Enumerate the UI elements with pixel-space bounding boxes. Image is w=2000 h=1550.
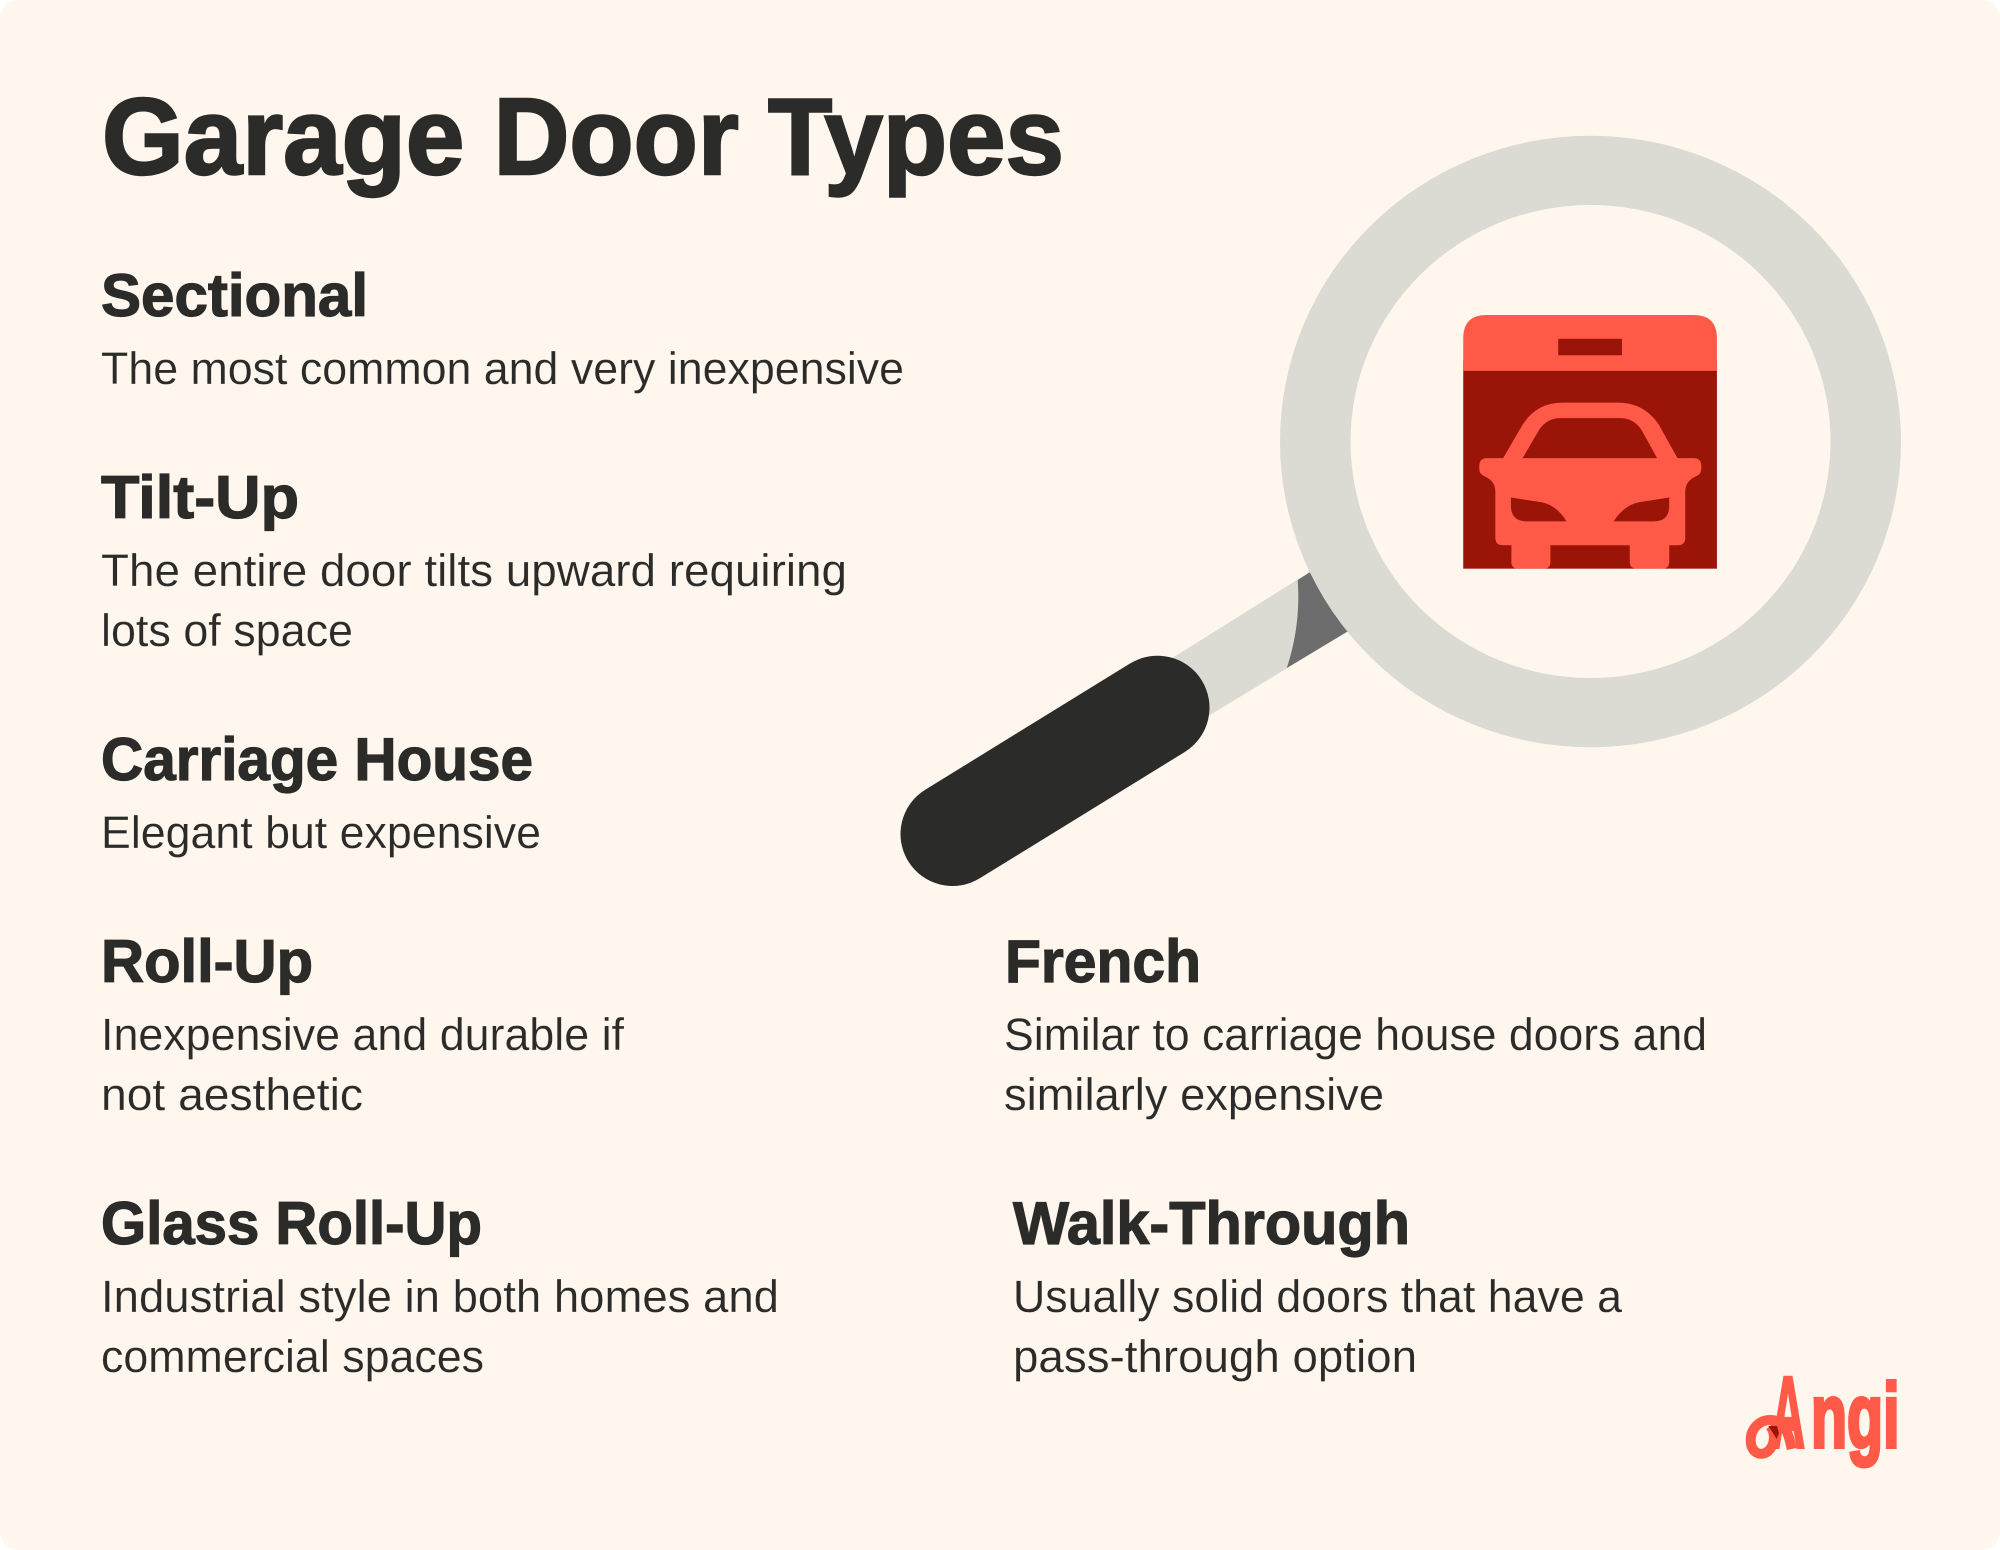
- title: Garage Door Types: [102, 76, 1064, 198]
- item: Walk-Through: [1013, 1190, 1623, 1382]
- logo overlap: [1768, 1426, 1779, 1439]
- car right headlight: [1614, 498, 1669, 521]
- item: Roll-Up: Inexpensive and durable if: [101, 1009, 624, 1060]
- item: Sectional: [101, 262, 904, 394]
- header slot: [1558, 339, 1622, 355]
- item: Carriage House: [101, 726, 541, 858]
- item: Glass Roll-Up: commercial spaces: [101, 1331, 484, 1382]
- item: French: French: [1005, 928, 1201, 995]
- item: Roll-Up: [101, 928, 624, 1120]
- item: French: similarly expensive: [1004, 1069, 1384, 1120]
- item: Glass Roll-Up: Glass Roll-Up: [101, 1190, 482, 1257]
- car left headlight: [1511, 498, 1566, 521]
- item: Walk-Through: Usually solid doors that have a: [1013, 1271, 1623, 1322]
- item: French: [1004, 928, 1707, 1120]
- item: Walk-Through: pass-through option: [1013, 1331, 1417, 1382]
- item: Sectional: Sectional: [101, 262, 368, 329]
- car windshield: [1523, 418, 1657, 458]
- item: Carriage House: Carriage House: [101, 726, 533, 793]
- item: Glass Roll-Up: [101, 1190, 779, 1382]
- car: [1479, 403, 1701, 569]
- item: French: Similar to carriage house doors and: [1004, 1009, 1707, 1060]
- magnifier shaft: [1150, 553, 1380, 715]
- item: Walk-Through: Walk-Through: [1013, 1190, 1410, 1257]
- logo: Angi: [1751, 1356, 1900, 1470]
- item: Sectional: The most common and very inexpensive: [101, 343, 904, 394]
- item: Roll-Up: Roll-Up: [101, 928, 313, 995]
- magnifier handle: [952, 708, 1158, 834]
- magnifier ring: [1280, 136, 1901, 747]
- shaft shadow: [1287, 553, 1380, 668]
- logo loop: [1751, 1420, 1792, 1454]
- item: Tilt-Up: lots of space: [101, 605, 353, 656]
- item: Carriage House: Elegant but expensive: [101, 807, 541, 858]
- garage header: [1463, 315, 1717, 371]
- logo: Angi: A: [1771, 1356, 1805, 1470]
- item: Tilt-Up: The entire door tilts upward requiring: [101, 545, 847, 596]
- logo wordmark: ngi: ngi: [1811, 1366, 1900, 1467]
- item: Tilt-Up: Tilt-Up: [101, 464, 299, 531]
- item: Tilt-Up: [101, 464, 847, 656]
- item: Roll-Up: not aesthetic: [101, 1069, 363, 1120]
- garage door opening: [1463, 361, 1717, 569]
- icon: garage with car: [1463, 315, 1717, 569]
- item: Glass Roll-Up: Industrial style in both homes and: [101, 1271, 779, 1322]
- icon: magnifying glass: [952, 136, 1901, 834]
